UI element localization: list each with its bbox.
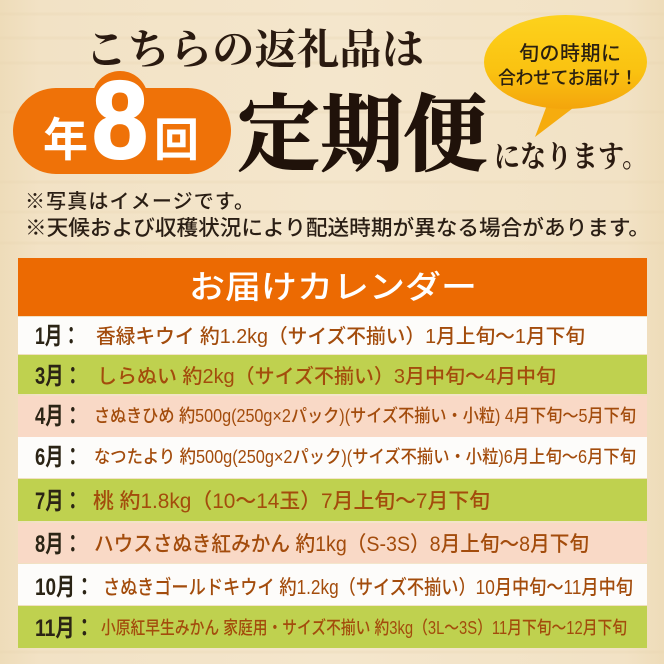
row: April: 4月： [35,403,82,430]
speech bubble: 旬の時期に合わせてお届け！: 旬の時期に [519,42,621,65]
row: April [18,396,647,437]
row: October: 10月： [35,574,94,601]
note: image disclaimer: ※写真はイメージです。 [25,190,254,213]
speech bubble: 旬の時期に合わせてお届け！: 合わせてお届け！ [498,68,638,88]
row: August: ハウスさぬき紅みかん 約1kg（S-3S）8月上旬～8月下旬 [94,533,589,556]
note: delivery disclaimer: ※天候および収穫状況により配送時期が異なる場合があります。 [25,217,650,240]
badge: 年8回: 回 [154,114,199,166]
row: June [18,437,647,478]
row: August: 8月： [35,531,82,558]
row: March: しらぬい 約2kg（サイズ不揃い）3月中旬～4月中旬 [97,365,556,388]
row: July [18,479,647,521]
row: October [18,564,647,605]
title: こちらの返礼品は: こちらの返礼品は [85,27,424,74]
heading: 定期便: 定期便 [237,90,487,183]
row: July: 7月： [35,488,82,515]
calendar header [18,258,647,316]
row: June: 6月： [35,444,82,471]
row: January: 香緑キウイ 約1.2kg（サイズ不揃い）1月上旬～1月下旬 [96,325,585,348]
calendar header: お届けカレンダー [189,269,477,305]
row: January: 1月： [35,323,80,350]
row: August [18,523,647,563]
row: March: 3月： [35,363,82,390]
row: July: 桃 約1.8kg（10～14玉）7月上旬～7月下旬 [93,490,490,513]
badge: 年8回 [13,59,231,182]
row: November: 11月： [35,615,94,642]
row: March [18,355,647,394]
speech bubble: 旬の時期に合わせてお届け！ [484,15,647,137]
row: January [18,317,647,354]
badge: 年8回: 年 [43,114,88,166]
row: November [18,606,647,648]
calendar panel [18,258,647,648]
badge: 年8回: 8 [92,59,148,182]
